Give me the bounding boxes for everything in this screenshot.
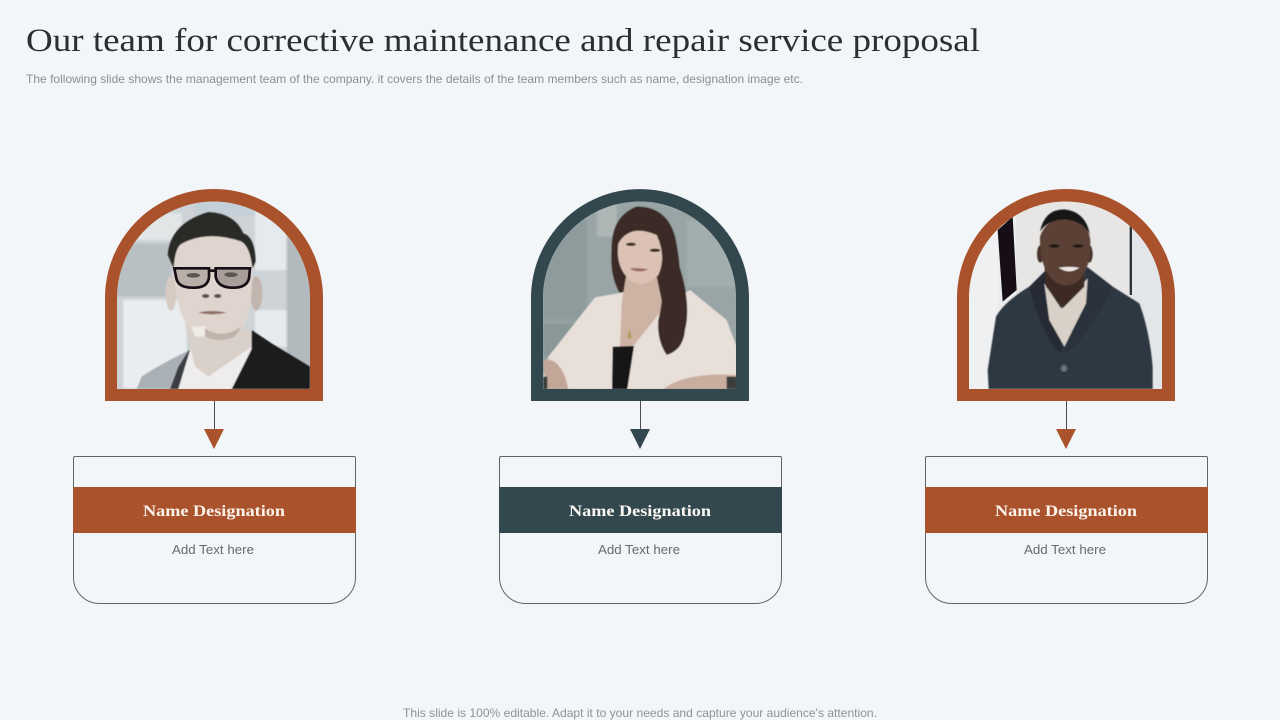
name label: Name Designation xyxy=(143,503,285,520)
card text: Add Text here xyxy=(598,542,680,557)
photo: woman in white cardigan xyxy=(540,200,740,390)
title: Our team for corrective maintenance and repair service proposal xyxy=(26,23,980,59)
name band xyxy=(73,487,356,533)
photo: man with glasses xyxy=(115,200,315,390)
team member 3 xyxy=(925,189,1208,604)
team member 1 xyxy=(73,189,356,604)
name band xyxy=(925,487,1208,533)
card text: Add Text here xyxy=(1024,542,1106,557)
card xyxy=(499,456,782,604)
connector arrow xyxy=(630,401,650,449)
footer note: This slide is 100% editable. Adapt it to your needs and capture your audience's attention. xyxy=(403,706,877,720)
card xyxy=(73,456,356,604)
arch frame xyxy=(531,189,749,401)
arch frame xyxy=(957,189,1175,401)
photo: man in dark cardigan xyxy=(986,202,1162,389)
connector arrow xyxy=(1056,401,1076,449)
name band xyxy=(499,487,782,533)
connector arrow xyxy=(204,401,224,449)
team member 2 xyxy=(499,189,782,604)
name label: Name Designation xyxy=(995,503,1137,520)
name label: Name Designation xyxy=(569,503,711,520)
arch frame xyxy=(105,189,323,401)
subtitle: The following slide shows the management team of the company. it covers the details of the team members such as name, designation image etc. xyxy=(26,72,803,86)
card text: Add Text here xyxy=(172,542,254,557)
card xyxy=(925,456,1208,604)
